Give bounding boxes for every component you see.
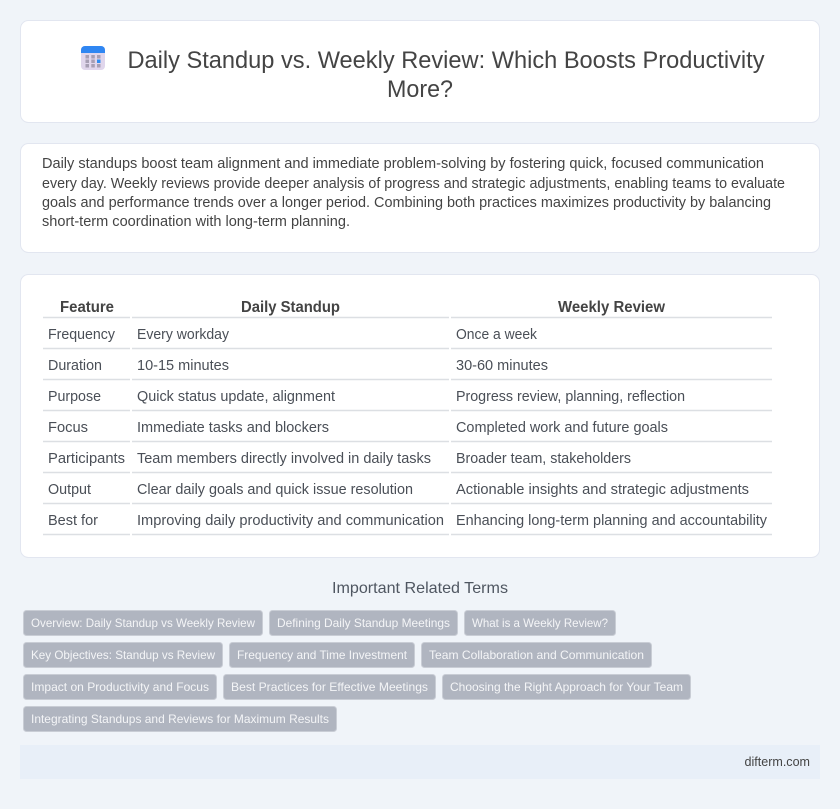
row: participants: Team members directly involved in daily tasks — [137, 451, 431, 467]
table header: Feature — [60, 299, 114, 316]
table header — [60, 299, 666, 316]
row: focus: Immediate tasks and blockers — [137, 420, 329, 436]
row: participants: Participants — [48, 451, 125, 467]
tag — [24, 642, 222, 668]
tag — [464, 610, 616, 636]
tag: Key Objectives: Standup vs Review — [31, 648, 215, 662]
text block: summary paragraph — [42, 156, 785, 230]
table header: Daily Standup — [241, 299, 340, 316]
row: participants: Broader team, stakeholders — [456, 451, 631, 467]
tag: Integrating Standups and Reviews for Maximum Results — [31, 712, 329, 726]
row: focus: Completed work and future goals — [456, 420, 668, 436]
row: best for — [48, 513, 768, 529]
panel: summary — [20, 144, 820, 252]
title: Daily Standup vs. Weekly Review: Which Boosts Productivity — [128, 47, 764, 74]
row: purpose: Quick status update, alignment — [137, 389, 335, 405]
panel: header — [20, 20, 820, 122]
row: best for: Enhancing long-term planning and accountability — [456, 513, 768, 529]
tags: related terms — [24, 610, 690, 732]
row: duration: 10-15 minutes — [137, 358, 229, 374]
row: frequency: Frequency — [48, 327, 116, 343]
row: output: Actionable insights and strategic adjustments — [456, 482, 749, 498]
text block: summary paragraph: goals and performance trends over a longer period. Combining both practices maximizes productivity by balancing — [42, 195, 771, 211]
tag: What is a Weekly Review? — [472, 616, 608, 630]
tag — [422, 642, 652, 668]
tag — [442, 674, 690, 700]
text block: summary paragraph: every day. Weekly reviews provide deeper analysis of progress and strategic adjustments, enabling teams to evaluate — [42, 176, 785, 192]
row: duration: 30-60 minutes — [456, 358, 548, 374]
tag: Team Collaboration and Communication — [429, 648, 644, 662]
tag — [24, 610, 262, 636]
row: focus — [48, 420, 668, 436]
row: focus: Focus — [48, 420, 88, 436]
row: duration — [48, 358, 548, 374]
text block: summary paragraph: short-term coordination with long-term planning. — [42, 214, 350, 230]
tag — [24, 706, 336, 732]
footer: difterm.com — [744, 754, 810, 769]
icon: calendar — [81, 46, 105, 70]
row: output — [48, 482, 749, 498]
tag — [224, 674, 436, 700]
row: output: Output — [48, 482, 91, 498]
row: purpose — [48, 389, 685, 405]
row: purpose: Progress review, planning, reflection — [456, 389, 685, 405]
row: frequency: Every workday — [137, 327, 230, 343]
panel: comparison table — [20, 274, 820, 558]
row: frequency — [48, 327, 538, 343]
tag: Choosing the Right Approach for Your Team — [450, 680, 683, 694]
row: participants — [48, 451, 631, 467]
row: frequency: Once a week — [456, 327, 538, 343]
row: purpose: Purpose — [48, 389, 101, 405]
table header: Weekly Review — [558, 299, 666, 316]
tag — [24, 674, 216, 700]
tag: Best Practices for Effective Meetings — [231, 680, 428, 694]
tag — [230, 642, 414, 668]
row: duration: Duration — [48, 358, 102, 374]
row: best for: Best for — [48, 513, 98, 529]
title — [128, 47, 764, 103]
text block: summary paragraph: Daily standups boost team alignment and immediate problem-solving by fostering quick, focused communication — [42, 156, 764, 172]
row: best for: Improving daily productivity and communication — [137, 513, 444, 529]
heading: important related terms: Important Related Terms — [332, 580, 508, 597]
tag — [270, 610, 458, 636]
footer — [20, 745, 820, 779]
tag: Defining Daily Standup Meetings — [277, 616, 450, 630]
row: output: Clear daily goals and quick issue resolution — [137, 482, 413, 498]
tag: Frequency and Time Investment — [237, 648, 408, 662]
tag: Overview: Daily Standup vs Weekly Review — [31, 616, 255, 630]
title: More? — [387, 76, 453, 103]
tag: Impact on Productivity and Focus — [31, 680, 209, 694]
